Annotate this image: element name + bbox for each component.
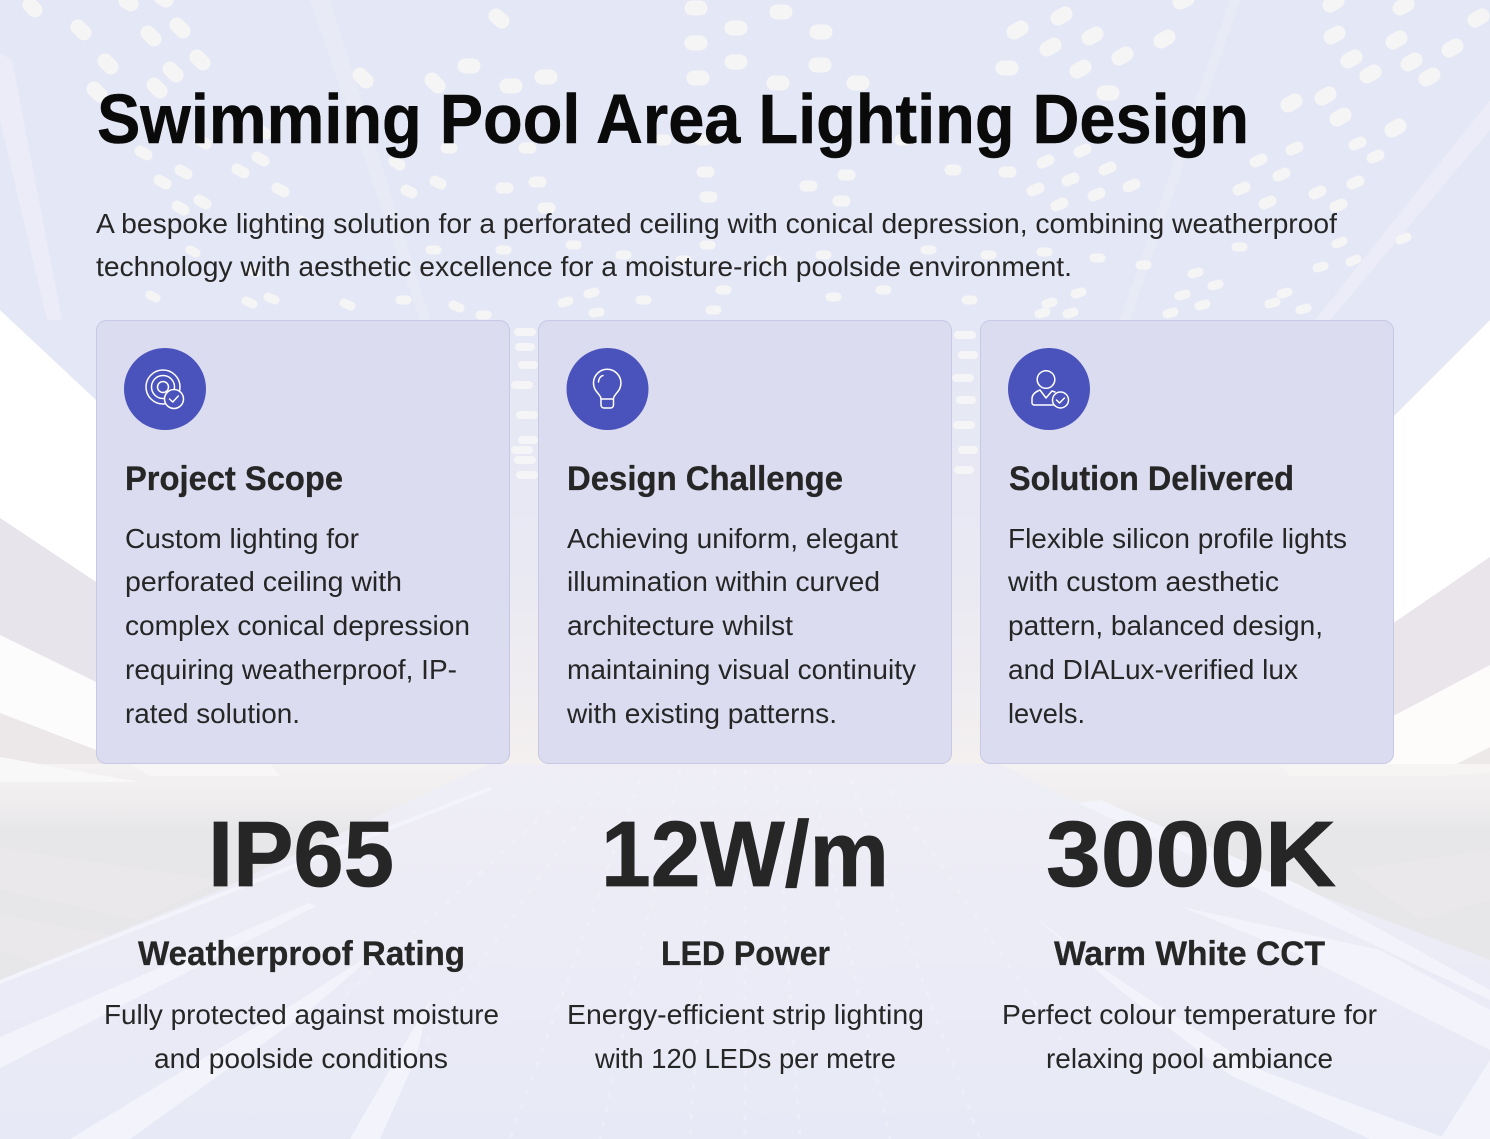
heading: design challenge: Design Challenge bbox=[567, 460, 843, 498]
stat: IP65 bbox=[104, 802, 499, 1074]
stat label: warm white CCT: Warm White CCT bbox=[1054, 935, 1325, 973]
body: design challenge: with existing patterns. bbox=[566, 698, 837, 729]
body: project scope: requiring weatherproof, IP- bbox=[125, 654, 457, 685]
body: design challenge: illumination within curved bbox=[567, 566, 880, 597]
stat description: warm white CCT: relaxing pool ambiance bbox=[1046, 1043, 1333, 1074]
icon: light bulb bbox=[566, 348, 648, 430]
stat label: weatherproof rating: Weatherproof Rating bbox=[138, 935, 465, 973]
stat: 3000K: 3000K bbox=[1046, 802, 1336, 906]
stat description: weatherproof rating: and poolside conditions bbox=[154, 1043, 448, 1074]
intro text bbox=[96, 208, 1337, 282]
body: design challenge: Achieving uniform, elegant bbox=[567, 523, 898, 554]
stat description: LED power bbox=[567, 999, 924, 1074]
body: project scope: perforated ceiling with bbox=[125, 566, 402, 597]
body: project scope: complex conical depression bbox=[125, 610, 470, 641]
icon: target with check bbox=[124, 348, 206, 430]
body: solution delivered: pattern, balanced design, bbox=[1008, 610, 1323, 641]
stat: IP65: IP65 bbox=[208, 802, 394, 906]
body: design challenge: maintaining visual continuity bbox=[567, 654, 916, 685]
body: design challenge: architecture whilst bbox=[567, 610, 793, 641]
stat description: warm white CCT bbox=[1002, 999, 1377, 1074]
stat description: weatherproof rating bbox=[104, 999, 499, 1074]
body: solution delivered: Flexible silicon profile lights bbox=[1008, 523, 1347, 554]
stat description: LED power: Energy-efficient strip lighting bbox=[567, 999, 924, 1030]
body: solution delivered: with custom aesthetic bbox=[1007, 566, 1279, 597]
body: solution delivered: and DIALux-verified lux bbox=[1008, 654, 1298, 685]
heading: solution delivered: Solution Delivered bbox=[1009, 460, 1294, 498]
stat description: warm white CCT: Perfect colour temperature for bbox=[1002, 999, 1377, 1030]
intro text: technology with aesthetic excellence for a moisture-rich poolside environment. bbox=[96, 251, 1072, 282]
stat description: weatherproof rating: Fully protected against moisture bbox=[104, 999, 499, 1030]
panel: design challenge bbox=[538, 320, 952, 764]
stat: 12W/m bbox=[567, 802, 924, 1074]
intro text: A bespoke lighting solution for a perforated ceiling with conical depression, combining weatherproof bbox=[96, 208, 1337, 239]
body: solution delivered bbox=[1007, 523, 1347, 729]
stat description: LED power: with 120 LEDs per metre bbox=[594, 1043, 896, 1074]
body: project scope bbox=[125, 523, 470, 729]
body: solution delivered: levels. bbox=[1008, 698, 1085, 729]
body: project scope: rated solution. bbox=[125, 698, 300, 729]
panel: solution delivered bbox=[980, 320, 1394, 764]
body: design challenge bbox=[566, 523, 916, 729]
stat: 3000K bbox=[1002, 802, 1377, 1074]
stat: 12W/m: 12W/m bbox=[601, 802, 889, 906]
body: project scope: Custom lighting for bbox=[125, 523, 359, 554]
title: Swimming Pool Area Lighting Design bbox=[97, 80, 1249, 158]
stat label: LED power: LED Power bbox=[661, 935, 830, 973]
heading: project scope: Project Scope bbox=[125, 460, 343, 498]
icon: person with check bbox=[1008, 348, 1090, 430]
panel: project scope bbox=[96, 320, 510, 764]
